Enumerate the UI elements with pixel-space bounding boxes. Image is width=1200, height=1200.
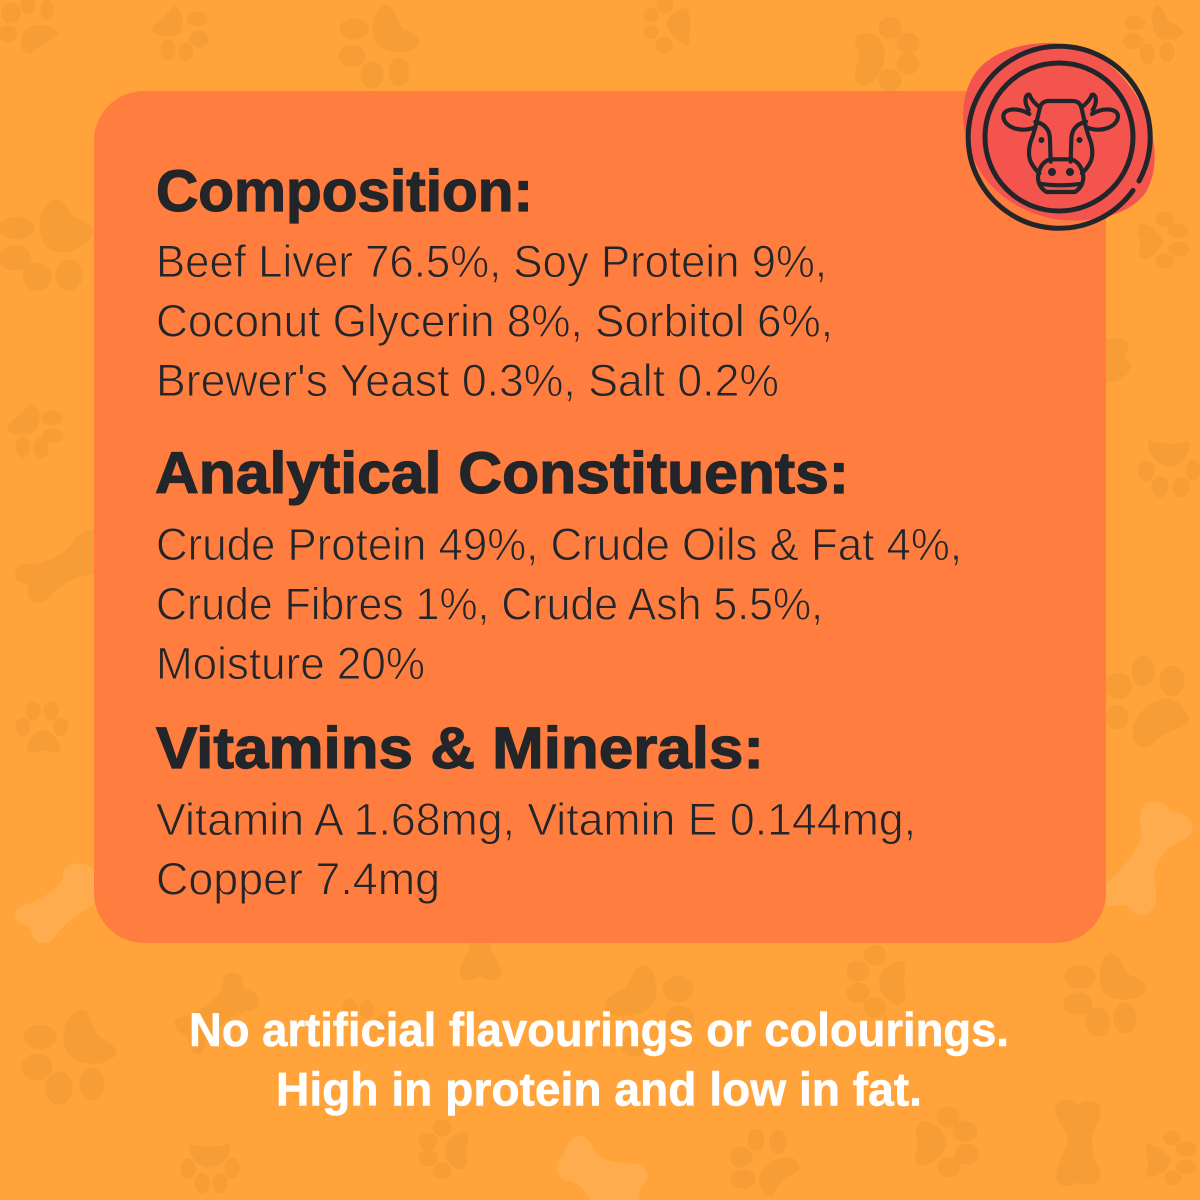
panel: nutrition information (94, 91, 1106, 943)
text block: analytical constituents list: Crude Protein 49%, Crude Oils & Fat 4%, (156, 519, 962, 570)
text block: analytical constituents list (156, 519, 962, 689)
text block: composition list: Brewer's Yeast 0.3%, Salt 0.2% (156, 355, 779, 406)
panel background (94, 91, 1106, 943)
text block: composition list: Beef Liver 76.5%, Soy Protein 9%, (156, 236, 827, 287)
heading: composition: Composition: (156, 159, 533, 224)
text block: vitamins and minerals list: Vitamin A 1.68mg, Vitamin E 0.144mg, (156, 794, 916, 845)
heading: analytical constituents: Analytical Constituents: (155, 441, 849, 506)
footer text (189, 1003, 1009, 1116)
cow head (1003, 95, 1118, 192)
heading: vitamins and minerals: Vitamins & Minerals: (156, 716, 764, 781)
light bones (15, 802, 1192, 1200)
badge rings (968, 46, 1150, 228)
footer text: No artificial flavourings or colourings. (189, 1003, 1009, 1056)
icon: cow badge (963, 43, 1155, 228)
text block: vitamins and minerals list: Copper 7.4mg (156, 854, 440, 904)
cow eyes and nostrils (1038, 137, 1082, 176)
text block: composition list (156, 236, 833, 406)
text block: analytical constituents list: Crude Fibres 1%, Crude Ash 5.5%, (156, 578, 823, 630)
text block: composition list: Coconut Glycerin 8%, Sorbitol 6%, (156, 296, 833, 346)
text block: vitamins and minerals list (156, 794, 916, 904)
footer text: High in protein and low in fat. (276, 1062, 922, 1116)
badge blob (963, 43, 1155, 220)
text block: analytical constituents list: Moisture 20% (156, 638, 425, 689)
